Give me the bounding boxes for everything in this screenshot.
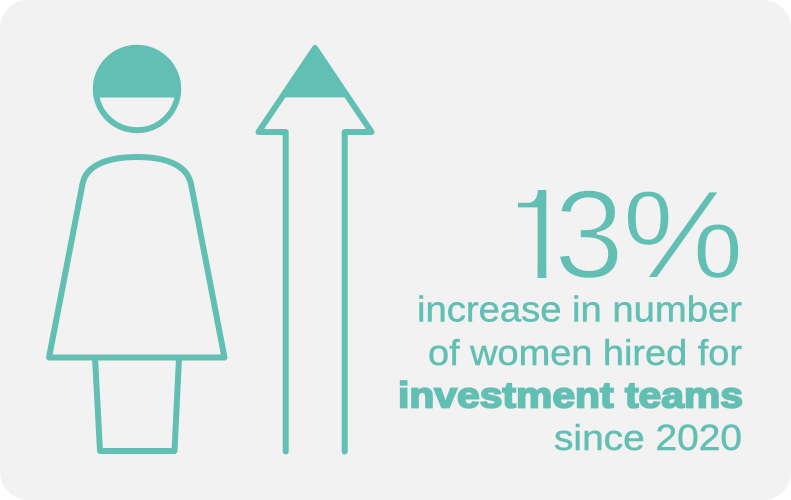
icon: body bbox=[49, 157, 224, 358]
digit 1: 1 bbox=[516, 164, 586, 305]
icon: legs bbox=[95, 358, 179, 451]
percent sign: % bbox=[622, 164, 744, 305]
digit 3: 3 bbox=[554, 164, 624, 305]
icon: up arrow half filled bbox=[258, 48, 372, 452]
text line: of women hired for bbox=[428, 332, 742, 373]
text block: description bbox=[398, 289, 743, 458]
icon: head half filled bbox=[93, 45, 181, 130]
text line: increase in number bbox=[417, 289, 742, 330]
text line: bold: investment teams bbox=[398, 374, 743, 416]
statistic: 13% bbox=[518, 190, 738, 278]
icon: woman figure bbox=[49, 45, 224, 451]
digit 1 bbox=[518, 190, 546, 278]
text line: since 2020 bbox=[554, 417, 742, 458]
